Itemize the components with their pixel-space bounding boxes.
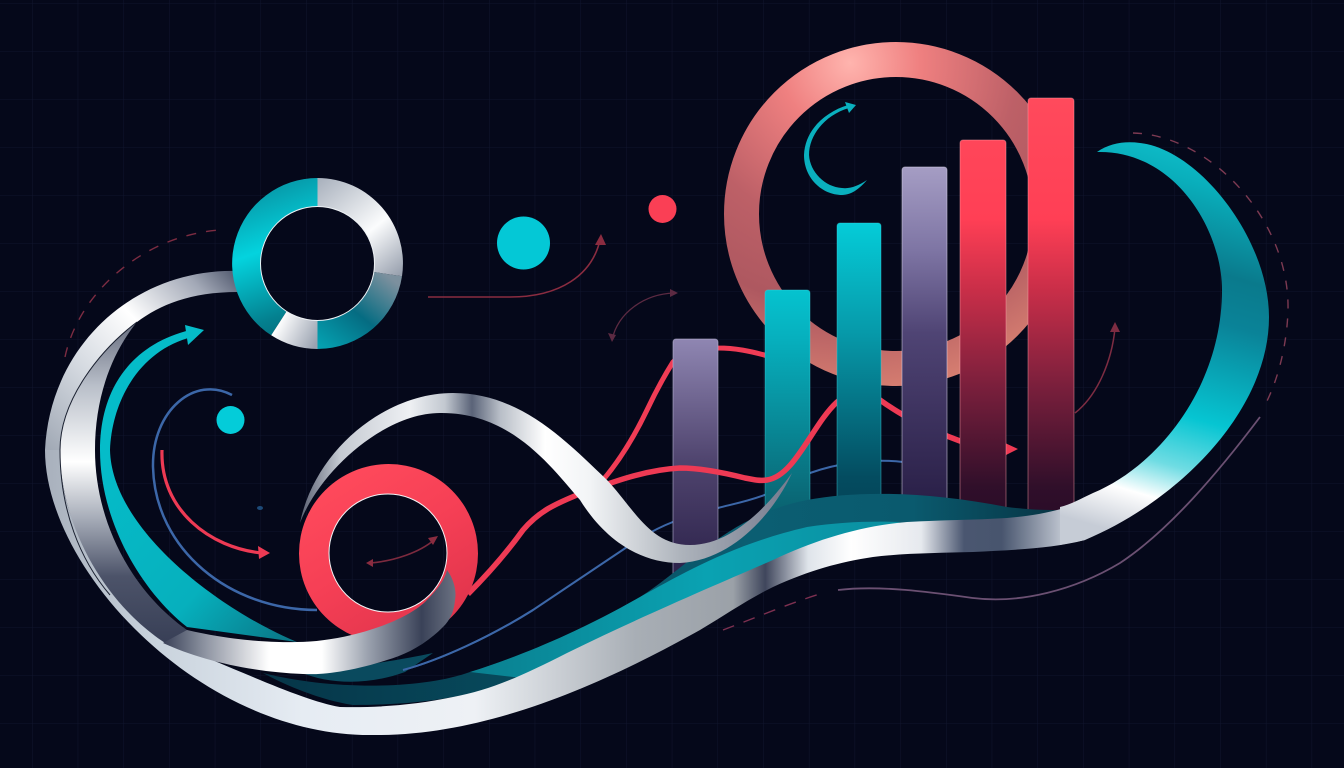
teal wave behind main ribbon	[263, 494, 1085, 705]
teal sliver under sweep	[300, 653, 433, 682]
red arrow: left	[162, 450, 270, 559]
bar 2: teal	[765, 290, 810, 530]
dashed arc: upper left	[65, 230, 220, 357]
thin arrow: small centre arc	[608, 289, 678, 342]
donut segment: teal grey lower	[318, 272, 402, 349]
red data line branch	[603, 348, 768, 480]
teal dot small	[216, 406, 244, 434]
blue curve: left	[153, 389, 317, 610]
donut segment: silver lower	[271, 311, 318, 349]
bright teal strip above main ribbon	[470, 522, 900, 680]
thin red arrow: centre top	[428, 234, 606, 297]
silver arc from donut	[45, 271, 238, 450]
bar 5: red	[960, 140, 1006, 512]
red ring	[299, 464, 478, 643]
red dot	[648, 195, 676, 223]
donut segment: teal	[232, 178, 318, 335]
bar 4: lavender	[902, 167, 947, 502]
red ring inner outline	[329, 494, 447, 612]
large salmon ring	[742, 60, 1050, 368]
silver s-curve ribbon	[300, 393, 792, 563]
small double arrow in red ring	[366, 536, 438, 567]
lower purple line with dashes	[723, 417, 1260, 630]
teal swoosh: right	[1060, 142, 1269, 545]
teal sweep: left	[100, 450, 297, 642]
blue data line	[403, 461, 903, 670]
blue line tail	[403, 610, 533, 670]
teal dot large	[497, 216, 550, 270]
teal arrow: left	[100, 325, 204, 450]
bar 1: purple	[673, 339, 718, 579]
fold shadow line	[60, 322, 137, 595]
dashed arc: right side	[1133, 133, 1288, 405]
donut chart	[232, 178, 403, 349]
icon: teal crescent arrow	[804, 102, 867, 195]
blue dot tiny	[257, 506, 263, 510]
donut inner outline	[260, 206, 374, 320]
thin red arrow: right of bars	[1075, 322, 1120, 413]
bar 6: red	[1028, 98, 1074, 516]
inner silver fold	[60, 322, 210, 646]
bar 3: teal	[837, 223, 881, 503]
donut segment: silver upper	[318, 178, 403, 276]
main silver ribbon	[45, 450, 1085, 735]
silver sweep around red ring	[163, 570, 456, 674]
red data line main with arrow	[468, 394, 1018, 594]
